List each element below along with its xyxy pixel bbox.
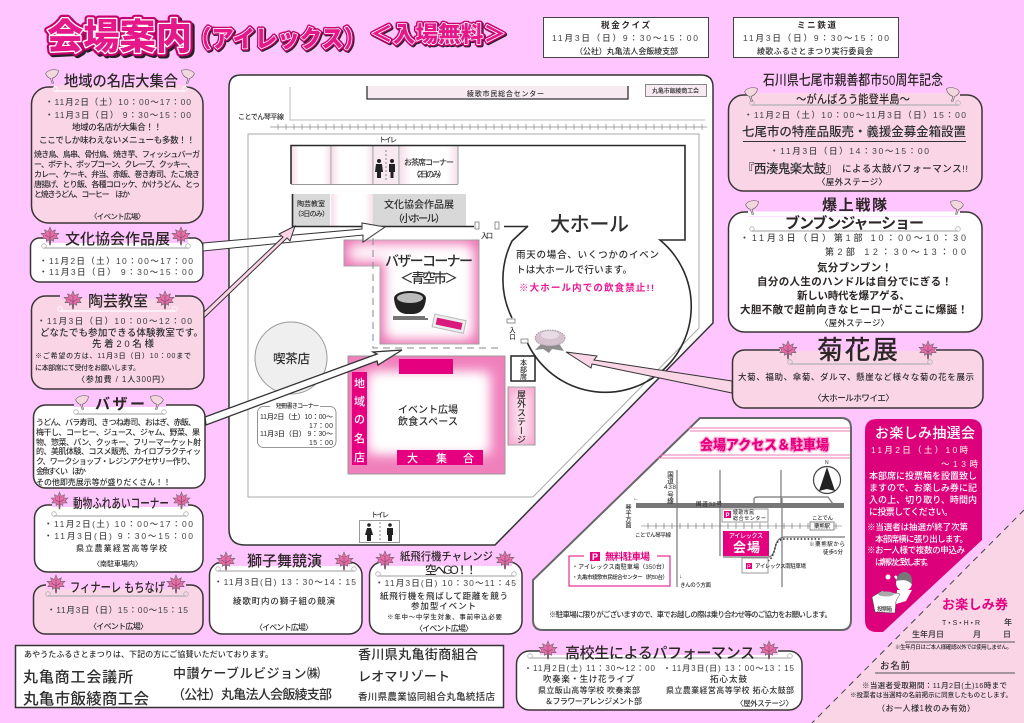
icon: maple (47, 575, 65, 593)
panel: bunbunger show: 大胆不敵で超前向きなヒーローがここに爆誕！ (740, 303, 968, 316)
heading: 爆上戦隊 (822, 196, 887, 214)
venue marker: 会場 (733, 540, 760, 555)
panel: lion dance (210, 552, 362, 634)
heading: 地域の名店大集合 (64, 73, 178, 90)
panel: bunbunger show: ・11月3日（日）第1部 10：00～10：30 (740, 232, 966, 243)
tanzaku writing corner: 17：00 (309, 423, 333, 430)
community center parking (722, 509, 768, 522)
panel: sponsors: 中讃ケーブルビジョン㈱ (173, 666, 320, 681)
panel: pottery class: 先着20名様 (92, 338, 154, 350)
free parking legend (569, 551, 670, 586)
free parking legend: P (592, 552, 598, 562)
cafe circle: 喫茶店 (273, 351, 310, 366)
panel: culture exhibit (30, 227, 203, 282)
panel: high school: 拓心太鼓 (710, 674, 747, 684)
icon: ginkgo (182, 70, 194, 83)
big hall label: 大ホール (550, 213, 629, 236)
panel: tax quiz: 税金クイズ (601, 20, 650, 30)
panel: bazaar (34, 396, 205, 488)
heading: 文化協会作品展 (65, 231, 170, 248)
heading: 獅子舞競演 (247, 553, 322, 570)
panel: high school: 県立飯山高等学校 吹奏楽部 (538, 685, 640, 695)
panel: animals: 県立農業経営高等学校 (76, 543, 167, 553)
panel: lottery: は無効と致します。 (875, 557, 933, 567)
panel: local shops: ー、ポテト、ポップコーン、クレープ、クッキー、 (34, 160, 195, 169)
panel: high school: ・11月2日(土) 11：30～12：00 (524, 663, 656, 673)
panel: lottery: ※当選者は抽選が終了次第 (867, 522, 968, 532)
panel: pottery class: ※ご希望の方は、11月3日（日）10：00まで (35, 351, 191, 360)
bazaar corner: バザーコーナー (385, 253, 473, 269)
free parking legend: ・アイレックス南駐車場（350台） (572, 563, 668, 571)
panel: bunbunger show: 自分の人生のハンドルは自分でにぎる！ (757, 275, 952, 288)
panel: paper plane: 紙飛行機を飛ばして距離を競う (380, 591, 508, 601)
panel: sponsors: 香川県農業協同組合丸亀統括店 (358, 691, 495, 703)
arrow: chrysanthemum (566, 352, 732, 393)
panel: finale: ・11月3日（日）15：00～15：15 (47, 605, 188, 615)
icon: maple (64, 291, 82, 309)
icon: ginkgo (951, 201, 963, 214)
panel: nanao (728, 72, 982, 191)
panel: high school: ＆フラワーアレンジメント部 (545, 696, 642, 706)
panel: mini railway (734, 18, 898, 58)
panel: lottery: 本部席横に張り出します。 (875, 534, 968, 544)
panel: local shops: ・11月3日（日） 9：30～15：00 (45, 110, 191, 120)
panel: chrysanthemum exhibit: 大菊、福助、傘菊、ダルマ、懸崖など様々な菊の花を展示 (738, 372, 974, 382)
panel: lottery: に投票してください。 (869, 506, 953, 517)
heading: ブンブンジャーショー (785, 214, 924, 232)
bottom toilet (360, 512, 400, 542)
road labels: ← (633, 496, 639, 502)
panel: local shops: と焼きうどん、コーヒー ほか (34, 189, 130, 199)
heading: ～がんばろう能登半島～ (796, 92, 910, 106)
station box (810, 522, 834, 530)
compass (814, 460, 840, 494)
icon: maple (167, 575, 185, 593)
panel: animals: ・11月3日(日) 9：30～15：00 (44, 531, 193, 541)
panel: lottery: ※お一人様で複数の申込み (867, 545, 965, 555)
event plaza (348, 356, 505, 474)
panel: nanao: ・11月2日（土）10：00～11月3日（日）15：00 (744, 110, 966, 120)
panel: pottery class: ・11月3日（日）10：00～12：00 (37, 316, 192, 326)
community center parking: P (726, 513, 730, 519)
panel: local shops: 地域の名店が大集合！！ (72, 122, 162, 132)
panel: high school (516, 641, 802, 710)
ticket form: ※生年月日はご本人様確認以外では使用しません。 (895, 643, 1012, 651)
panel: sponsors: あやうたふるさとまつりは、下記の方にご協賛いただいております。 (24, 649, 273, 659)
icon: maple (496, 551, 514, 569)
tanzaku writing corner: 11月3日（日） 9：30～ (260, 430, 333, 438)
chamber of commerce building: 丸亀市飯綾商工会 (652, 87, 699, 95)
icon: ballot box with child (872, 572, 912, 613)
panel: high school: 県立農業経営高等学校 拓心太鼓部 (666, 685, 794, 695)
panel: local shops: 焼き鳥、鳥串、骨付鳥、焼き芋、フィッシュバーガ (34, 149, 200, 159)
heading: 動物ふれあいコーナー (73, 496, 169, 511)
icon: ginkgo (76, 396, 88, 409)
icon: udon bowl (393, 291, 428, 319)
panel: chrysanthemum exhibit (732, 335, 983, 408)
heading: 陶芸教室 (88, 293, 148, 310)
venue marker: アイレックス (729, 532, 763, 540)
panel: local shops: ・11月2日（土）10：00～17：00 (45, 97, 191, 107)
road labels: 徒歩5分 (823, 548, 843, 556)
panel: lion dance: 綾歌町内の獅子組の競演 (233, 596, 335, 606)
title: 会場案内 (47, 16, 192, 57)
banner: great gathering: 合 (463, 451, 474, 465)
panel: lottery: ～13時 (941, 459, 978, 469)
bottom toilet: トイレ (371, 512, 389, 519)
venue marker (723, 531, 769, 556)
culture association exhibit room: 文化協会作品展 (384, 198, 454, 211)
title: （アイレックス） (189, 26, 366, 53)
panel: local shops (32, 70, 203, 223)
panel: lion dance: ・11月3日(日) 13：30～14：15 (214, 577, 356, 587)
icon: maple (760, 641, 778, 659)
heading: バザー (95, 396, 145, 413)
panel: nanao: ・11月3日（日）14：30～15：00 (770, 146, 929, 156)
panel: lottery: ますので、お楽しみ券に記 (869, 482, 977, 493)
road labels: 国道32号 (696, 500, 722, 508)
icon: maple (376, 551, 394, 569)
panel: local shops: ここでしか味わえないメニューも多数！！ (39, 135, 195, 145)
ticket form (850, 597, 1015, 713)
road labels: 国道 (666, 471, 674, 485)
panel: mini railway: 11月3日（日）9：30～15：00 (743, 33, 889, 43)
heading (763, 72, 943, 106)
icon: ballot box with child: 投票箱 (877, 605, 892, 613)
tanzaku writing corner (258, 402, 336, 448)
culture association exhibit room (373, 194, 466, 226)
compass: N (825, 460, 829, 466)
panel: high school: ・11月3日(日) 13：00～13：15 (663, 664, 795, 673)
headquarters booth (511, 356, 535, 381)
icon: maple (156, 291, 174, 309)
tea corner label (404, 157, 454, 179)
icon: chrysanthemum (535, 330, 565, 353)
panel: bazaar: その他即売展示等が盛りだくさん！！ (36, 477, 171, 487)
panel: tax quiz (544, 18, 708, 58)
community center building: 綾歌市民総合センター (467, 89, 544, 98)
ticket form: お楽しみ券 (942, 597, 1008, 612)
tanzaku writing corner: 短冊書きコーナー (276, 402, 319, 410)
banner: local famous shops (352, 372, 367, 465)
tanzaku writing corner: 11月2日（土）10：00～ (260, 412, 333, 421)
arrow: culture exhibit (203, 223, 385, 251)
panel: paper plane: 〈イベント広場〉 (415, 623, 473, 633)
ticket form: ※当選者受取期間：11月2日(土)16時まで (862, 680, 1007, 690)
access heading: 会場アクセス＆駐車場 (700, 437, 829, 453)
panel: pottery class: 〈参加費 / 1人300円〉 (77, 374, 169, 384)
event plaza: 飲食スペース (398, 415, 458, 428)
big hall notes: 雨天の場合、いくつかのイベン (516, 249, 659, 261)
headquarters booth: 本部席 (520, 358, 527, 381)
pottery room: 陶芸教室 (297, 199, 325, 208)
panel: nanao: 七尾市の特産品販売・義援金募金箱設置 (742, 124, 966, 139)
banner: local famous shops: の (354, 414, 365, 426)
road labels: 号線 (666, 491, 674, 505)
arrow: bazaar (205, 350, 402, 425)
ticket form: T・S・H・R (942, 620, 980, 627)
ticket form: （お一人様1枚のみ有効） (877, 703, 975, 713)
banner: local famous shops: 地 (354, 376, 365, 390)
banner: great gathering: 集 (436, 451, 447, 465)
panel: bazaar: 金魚すくい ほか (36, 466, 86, 476)
ticket form: お名前 (880, 660, 910, 672)
ticket form: 年 (1004, 617, 1012, 627)
big hall notes (516, 249, 659, 294)
ticket corner background (812, 510, 1024, 723)
icon: maple (217, 552, 235, 570)
icon: ginkgo (46, 70, 58, 83)
pottery room (292, 194, 330, 226)
panel: bunbunger show: 〈屋外ステージ〉 (820, 318, 889, 328)
community center building (367, 86, 628, 99)
panel: nanao: 『西湊鬼楽太鼓』 (742, 161, 838, 176)
panel: sponsors: 丸亀市飯綾商工会 (23, 690, 149, 708)
panel: paper plane: ※年中～中学生対象、事前申込必要 (387, 612, 502, 621)
panel: bazaar: 物、惣菜、パン、クッキー、フリーマーケット射 (36, 437, 201, 447)
bazaar corner: ＜青空市＞ (400, 270, 458, 286)
panel: bazaar: 的、美肌体験、コスメ販売、カイロプラクティッ (36, 446, 201, 456)
panel: bunbunger show: 気分ブンブン！ (817, 261, 892, 274)
heading: 石川県七尾市親善都市50周年記念 (763, 72, 943, 88)
arrow: pottery (204, 226, 295, 318)
venue map (229, 75, 713, 545)
panel: finale: 〈イベント広場〉 (89, 621, 148, 631)
tea corner label: お茶席コーナー (404, 157, 454, 167)
title: 会場案内 (47, 16, 192, 57)
panel: bazaar: 梅干し、コーヒー、ジュース、ジャム、野菜、果 (36, 427, 200, 437)
community center parking: 総合センター (733, 515, 766, 522)
panel: high school: 〈屋外ステージ〉 (736, 698, 793, 708)
south parking (742, 558, 806, 573)
parking note: ※駐車場に限りがございますので、車でお越しの際は乗り合わせ等のご協力をお願いします。 (549, 609, 832, 619)
bazaar corner (344, 240, 479, 344)
icon: ginkgo (947, 88, 959, 101)
tanzaku writing corner: 15：00 (309, 440, 333, 447)
cafe circle (255, 322, 327, 394)
icon: toilet people (375, 159, 395, 178)
panel: nanao: による太鼓パフォーマンス!! (842, 163, 968, 175)
panel: bazaar: ク、ワークショップ・レジンアクセサリー作り、 (36, 456, 195, 466)
heading (785, 196, 924, 232)
icon: maple (41, 227, 59, 245)
big hall notes: トは大ホールで行います。 (516, 264, 632, 276)
road labels: 琴平方面 (624, 504, 631, 529)
road labels: ことでん (812, 515, 833, 522)
free parking legend: 無料駐車場 (605, 551, 650, 563)
banner: local famous shops: 域 (354, 395, 365, 408)
outdoor stage: 屋外ステージ (516, 390, 526, 444)
upper rooms and big hall outline (291, 146, 691, 392)
panel: local shops: 唐揚げ、とり飯、各種コロッケ、かけうどん、とっ (34, 179, 200, 189)
culture association exhibit room: （小ホール） (393, 213, 445, 225)
panel: paper plane: ・11月3日(日) 10：30～11：45 (375, 578, 516, 588)
banner: local famous shops: 名 (354, 431, 365, 445)
ticket form: 生年月日 (912, 629, 944, 639)
event plaza: イベント広場 (398, 404, 458, 416)
entrance top: 入口 (481, 232, 493, 240)
panel: culture exhibit: ・11月3日（日） 9：30～15：00 (39, 267, 193, 277)
title: ＜入場無料＞ (370, 22, 506, 47)
icon: maple (335, 552, 353, 570)
panel: bazaar: うどん、バラ寿司、きつね寿司、おはぎ、赤飯、 (36, 417, 196, 427)
icon: snack pack (432, 314, 466, 333)
panel: paper plane (370, 549, 522, 634)
icon: ginkgo (746, 201, 758, 214)
big hall notes: ※大ホール内での飲食禁止!! (519, 282, 654, 294)
station box: 栗熊駅 (814, 522, 830, 530)
heading: 高校生によるパフォーマンス (565, 645, 755, 662)
pottery room: （3日のみ） (294, 210, 329, 218)
south parking: P (747, 564, 751, 570)
entrance lower (507, 319, 528, 343)
road labels (624, 471, 845, 589)
free parking legend: ・丸亀市綾歌市民総合センター（約50台） (572, 573, 668, 581)
icon: maple (51, 492, 68, 509)
title (47, 16, 506, 57)
heading: 菊花展 (817, 335, 898, 365)
title: ＜入場無料＞ (370, 22, 506, 47)
panel: lottery (865, 419, 982, 632)
icon: maple (539, 641, 557, 659)
icon: maple (173, 492, 190, 509)
panel: mini railway: 綾歌ふるさとまつり実行委員会 (757, 46, 873, 56)
panel: pottery class: に本部席にて受付をお願いします。 (35, 363, 140, 372)
panel: animals (34, 492, 203, 572)
roads (636, 470, 845, 587)
road labels: きんのう方面 (680, 581, 711, 589)
road labels: ことでん琴平線 (635, 531, 671, 539)
panel: bunbunger show (728, 196, 982, 332)
panel: chrysanthemum exhibit: 〈大ホールホワイエ〉 (813, 393, 894, 403)
tea corner label: （2日のみ） (412, 170, 446, 179)
panel: lottery: 本部席に投票箱を設置致し (869, 470, 977, 481)
icon: ginkgo (151, 396, 163, 409)
road labels: ※栗熊駅から (809, 540, 845, 548)
ticket form: 日 (1003, 630, 1011, 639)
panel: high school: 吹奏楽・生け花ライブ (543, 674, 634, 684)
ticket form: 月 (973, 630, 981, 639)
railway line (270, 124, 707, 130)
ticket form: ※投票者は当選時の名前掲示に同意したものとします。 (850, 690, 1012, 699)
panel: tax quiz: （公社）丸亀法人会飯綾支部 (575, 46, 678, 56)
panel: animals: 〈南駐車場内〉 (93, 559, 142, 568)
road labels: 438 (664, 484, 676, 491)
icon: ginkgo (745, 88, 757, 101)
heading: 紙飛行機チャレンジ (400, 549, 493, 563)
panel: nanao: 〈屋外ステージ〉 (817, 177, 887, 187)
panel: tax quiz: 11月3日（日）9：30～15：00 (552, 33, 698, 43)
panel: sponsors: 香川県丸亀街商組合 (358, 647, 478, 662)
heading: フィナーレ もちなげ (70, 580, 165, 595)
banner: great gathering: 大 (407, 451, 418, 465)
community center parking: 綾歌市民 (733, 509, 754, 516)
banner: local famous shops: 店 (354, 451, 365, 464)
label: kotoden line: ことでん琴平線 (238, 112, 284, 121)
panel: bunbunger show: 新しい時代を爆アゲる、 (797, 289, 910, 302)
panel: sponsors: 丸亀商工会議所 (23, 669, 133, 686)
panel: lottery: お楽しみ抽選会 (875, 425, 975, 441)
panel: culture exhibit: ・11月2日（土）10：00～17：00 (39, 256, 193, 266)
panel: local shops: 〈イベント広場〉 (90, 211, 145, 221)
panel: paper plane: 参加型イベント (411, 601, 476, 611)
panel: pottery class: どなたでも参加できる体験教室です。 (40, 327, 203, 339)
title: （アイレックス） (189, 26, 366, 53)
entrance lower: 入口 (508, 327, 516, 340)
heading: 空へGO！！ (425, 563, 477, 577)
toilet label: トイレ (379, 137, 397, 144)
access map panel (533, 418, 851, 630)
icon: maple (172, 227, 190, 245)
banner: great gathering (397, 450, 483, 465)
panel: sponsors: レオマリゾート (358, 669, 450, 684)
outdoor stage (508, 387, 535, 445)
south parking: アイレックス南駐車場 (755, 562, 806, 570)
icon: maple (779, 341, 797, 359)
road labels: ↓ (679, 574, 682, 580)
panel: sponsors: （公社）丸亀法人会飯綾支部 (172, 687, 332, 702)
panel: mini railway: ミニ鉄道 (797, 20, 836, 30)
panel: lion dance: 〈イベント広場〉 (255, 622, 313, 632)
icon: maple (919, 341, 937, 359)
panel: sponsors (16, 646, 504, 708)
chamber of commerce building (646, 84, 706, 96)
panel: bunbunger show: 第2部 12：30～13：00 (825, 246, 966, 257)
panel: finale (34, 575, 203, 634)
panel: pottery class (32, 290, 204, 389)
heading (400, 549, 493, 577)
panel: animals: ・11月2日(土) 10：00～17：00 (44, 519, 193, 529)
panel: lottery: 11月2日（土）10時 (871, 445, 968, 455)
entrance top (475, 222, 499, 240)
panel: local shops: カレー、ケーキ、弁当、赤飯、巻き寿司、たこ焼き (34, 169, 200, 179)
panel: lottery: 入の上、切り取り、時間内 (869, 494, 977, 505)
